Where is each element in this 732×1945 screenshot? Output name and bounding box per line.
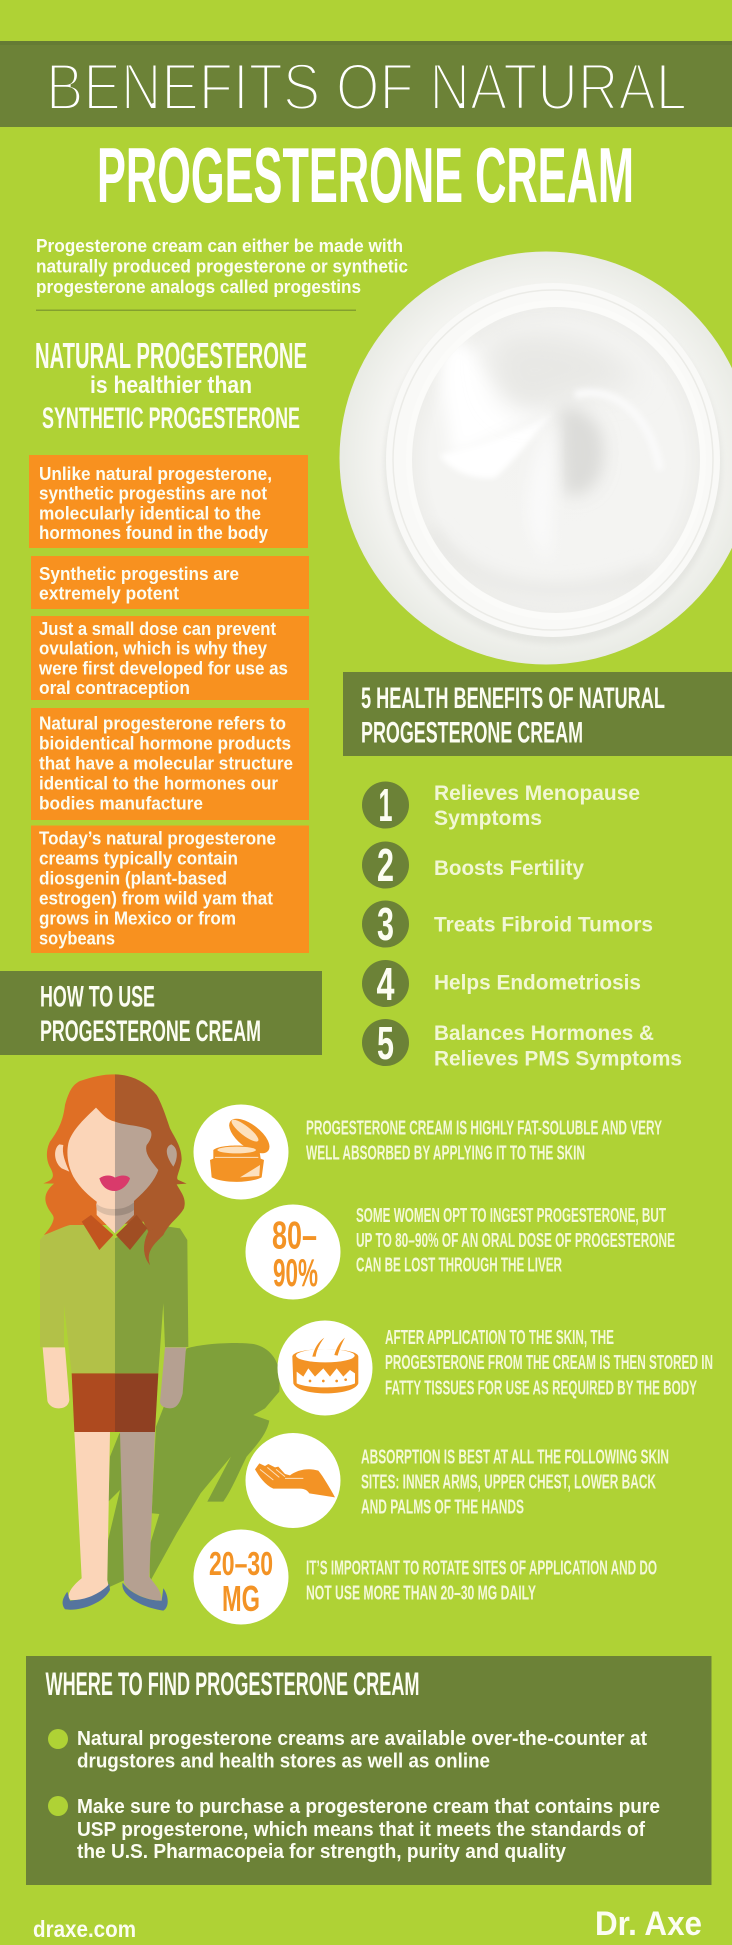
orange box 4: bodies manufacture (39, 794, 203, 814)
orange box 3: ovulation, which is why they (39, 638, 267, 658)
woman shadow (107, 1343, 280, 1588)
step 3 icon: fatty tissue (278, 1320, 372, 1416)
intro text (36, 236, 408, 297)
orange box 3: oral contraception (39, 678, 190, 698)
step 5 icon: 20-30 mg (194, 1530, 288, 1624)
orange box 5: estrogen) from wild yam that (39, 888, 273, 908)
step 4 text: AND PALMS OF THE HANDS (361, 1496, 524, 1518)
divider (36, 310, 356, 311)
step 1 text (306, 1116, 662, 1164)
bullet 1: Natural progesterone creams are available over-the-counter at (77, 1728, 647, 1750)
orange box 2: Synthetic progestins are (39, 564, 239, 584)
benefit 4: Helps Endometriosis (434, 972, 641, 994)
benefit 5: 5 (377, 1017, 394, 1069)
intro text: progesterone analogs called progestins (36, 277, 361, 297)
orange box 3 (31, 616, 309, 700)
orange box 1: molecularly identical to the (39, 504, 261, 524)
benefit 4 (362, 958, 641, 1010)
step 2 text: CAN BE LOST THROUGH THE LIVER (356, 1254, 562, 1276)
orange box 2 (31, 556, 309, 609)
step 5 text (306, 1556, 657, 1604)
benefit 2: 2 (377, 839, 394, 891)
orange box 4: bioidentical hormone products (39, 734, 291, 754)
shirt (40, 1222, 188, 1373)
how to use banner: PROGESTERONE CREAM (40, 1015, 261, 1048)
step 4 icon: hand (246, 1433, 340, 1528)
subheading: natural vs synthetic: SYNTHETIC PROGESTERONE (42, 402, 300, 435)
footer: logo: Dr. Axe (595, 1905, 702, 1943)
step 2 text (356, 1204, 675, 1276)
step 5 icon: 20-30 mg: 20–30 (209, 1545, 273, 1582)
orange box 4: that have a molecular structure (39, 754, 293, 774)
orange box 1: hormones found in the body (39, 523, 268, 543)
orange box 1 (29, 455, 308, 548)
benefit 2 (362, 839, 584, 891)
health benefits banner: PROGESTERONE CREAM (361, 716, 583, 750)
step 5 text: NOT USE MORE THAN 20–30 MG DAILY (306, 1582, 536, 1604)
how to use banner: HOW TO USE (40, 980, 155, 1014)
orange box 4: identical to the hormones our (39, 774, 278, 794)
step 5 icon: 20-30 mg: MG (222, 1578, 260, 1619)
benefit 3: Treats Fibroid Tumors (434, 914, 653, 936)
step 2 icon: 80-90%: 80– (272, 1214, 317, 1258)
subheading: natural vs synthetic: is healthier than (90, 372, 252, 399)
health benefits banner (343, 672, 732, 756)
benefit 4: 4 (376, 958, 395, 1010)
benefit 5: Relieves PMS Symptoms (434, 1048, 682, 1070)
intro text: Progesterone cream can either be made with (36, 236, 403, 256)
bullet 2 (48, 1796, 660, 1863)
bullet 1 (48, 1728, 647, 1772)
benefit 5 (362, 1017, 682, 1070)
benefit 5: Balances Hormones & (434, 1022, 654, 1045)
orange box 2: extremely potent (39, 584, 179, 604)
benefit 1: Relieves Menopause (434, 782, 640, 805)
lower body (43, 1347, 186, 1611)
woman figure (40, 1074, 188, 1611)
benefit 2: Boosts Fertility (434, 857, 584, 880)
bullet 1: drugstores and health stores as well as online (77, 1750, 490, 1772)
head (43, 1074, 187, 1265)
benefit 3: 3 (377, 898, 394, 950)
step 2 icon: 80-90% (246, 1204, 340, 1300)
bullet 2: the U.S. Pharmacopeia for strength, purity and quality (77, 1841, 567, 1863)
bullet 2: Make sure to purchase a progesterone cream that contains pure (77, 1796, 660, 1818)
orange box 4 (31, 708, 309, 820)
orange box 5: creams typically contain (39, 848, 238, 868)
subheading: natural vs synthetic (35, 335, 307, 435)
intro text: naturally produced progesterone or synthetic (36, 256, 408, 276)
step 1 icon: cream jar (194, 1104, 288, 1200)
how to use banner (0, 971, 322, 1055)
orange box 1: synthetic progestins are not (39, 484, 267, 504)
orange box 5: diosgenin (plant-based (39, 868, 227, 888)
bullet 2: USP progesterone, which means that it meets the standards of (77, 1819, 645, 1841)
benefit 3 (362, 898, 653, 950)
panel: where to find (26, 1656, 712, 1885)
orange box 5: soybeans (39, 928, 115, 948)
step 2 icon: 80-90%: 90% (273, 1252, 318, 1295)
cream jar image (340, 252, 732, 664)
orange box 4: Natural progesterone refers to (39, 714, 286, 734)
step 3 text (385, 1326, 713, 1400)
orange box 3: Just a small dose can prevent (39, 619, 276, 639)
orange box 3: were first developed for use as (38, 658, 288, 678)
benefit 1: 1 (378, 779, 392, 831)
orange box 1: Unlike natural progesterone, (39, 464, 272, 484)
benefit 1: Symptoms (434, 807, 542, 830)
orange box 5: grows in Mexico or from (39, 908, 236, 928)
panel heading: WHERE TO FIND PROGESTERONE CREAM (46, 1666, 420, 1702)
orange box 5 (31, 826, 309, 953)
benefit 1 (362, 779, 640, 831)
step 4 text (361, 1446, 669, 1518)
orange box 5: Today’s natural progesterone (39, 828, 276, 848)
footer: website: draxe.com (33, 1916, 136, 1942)
subheading: natural vs synthetic: NATURAL PROGESTERONE (35, 335, 307, 376)
